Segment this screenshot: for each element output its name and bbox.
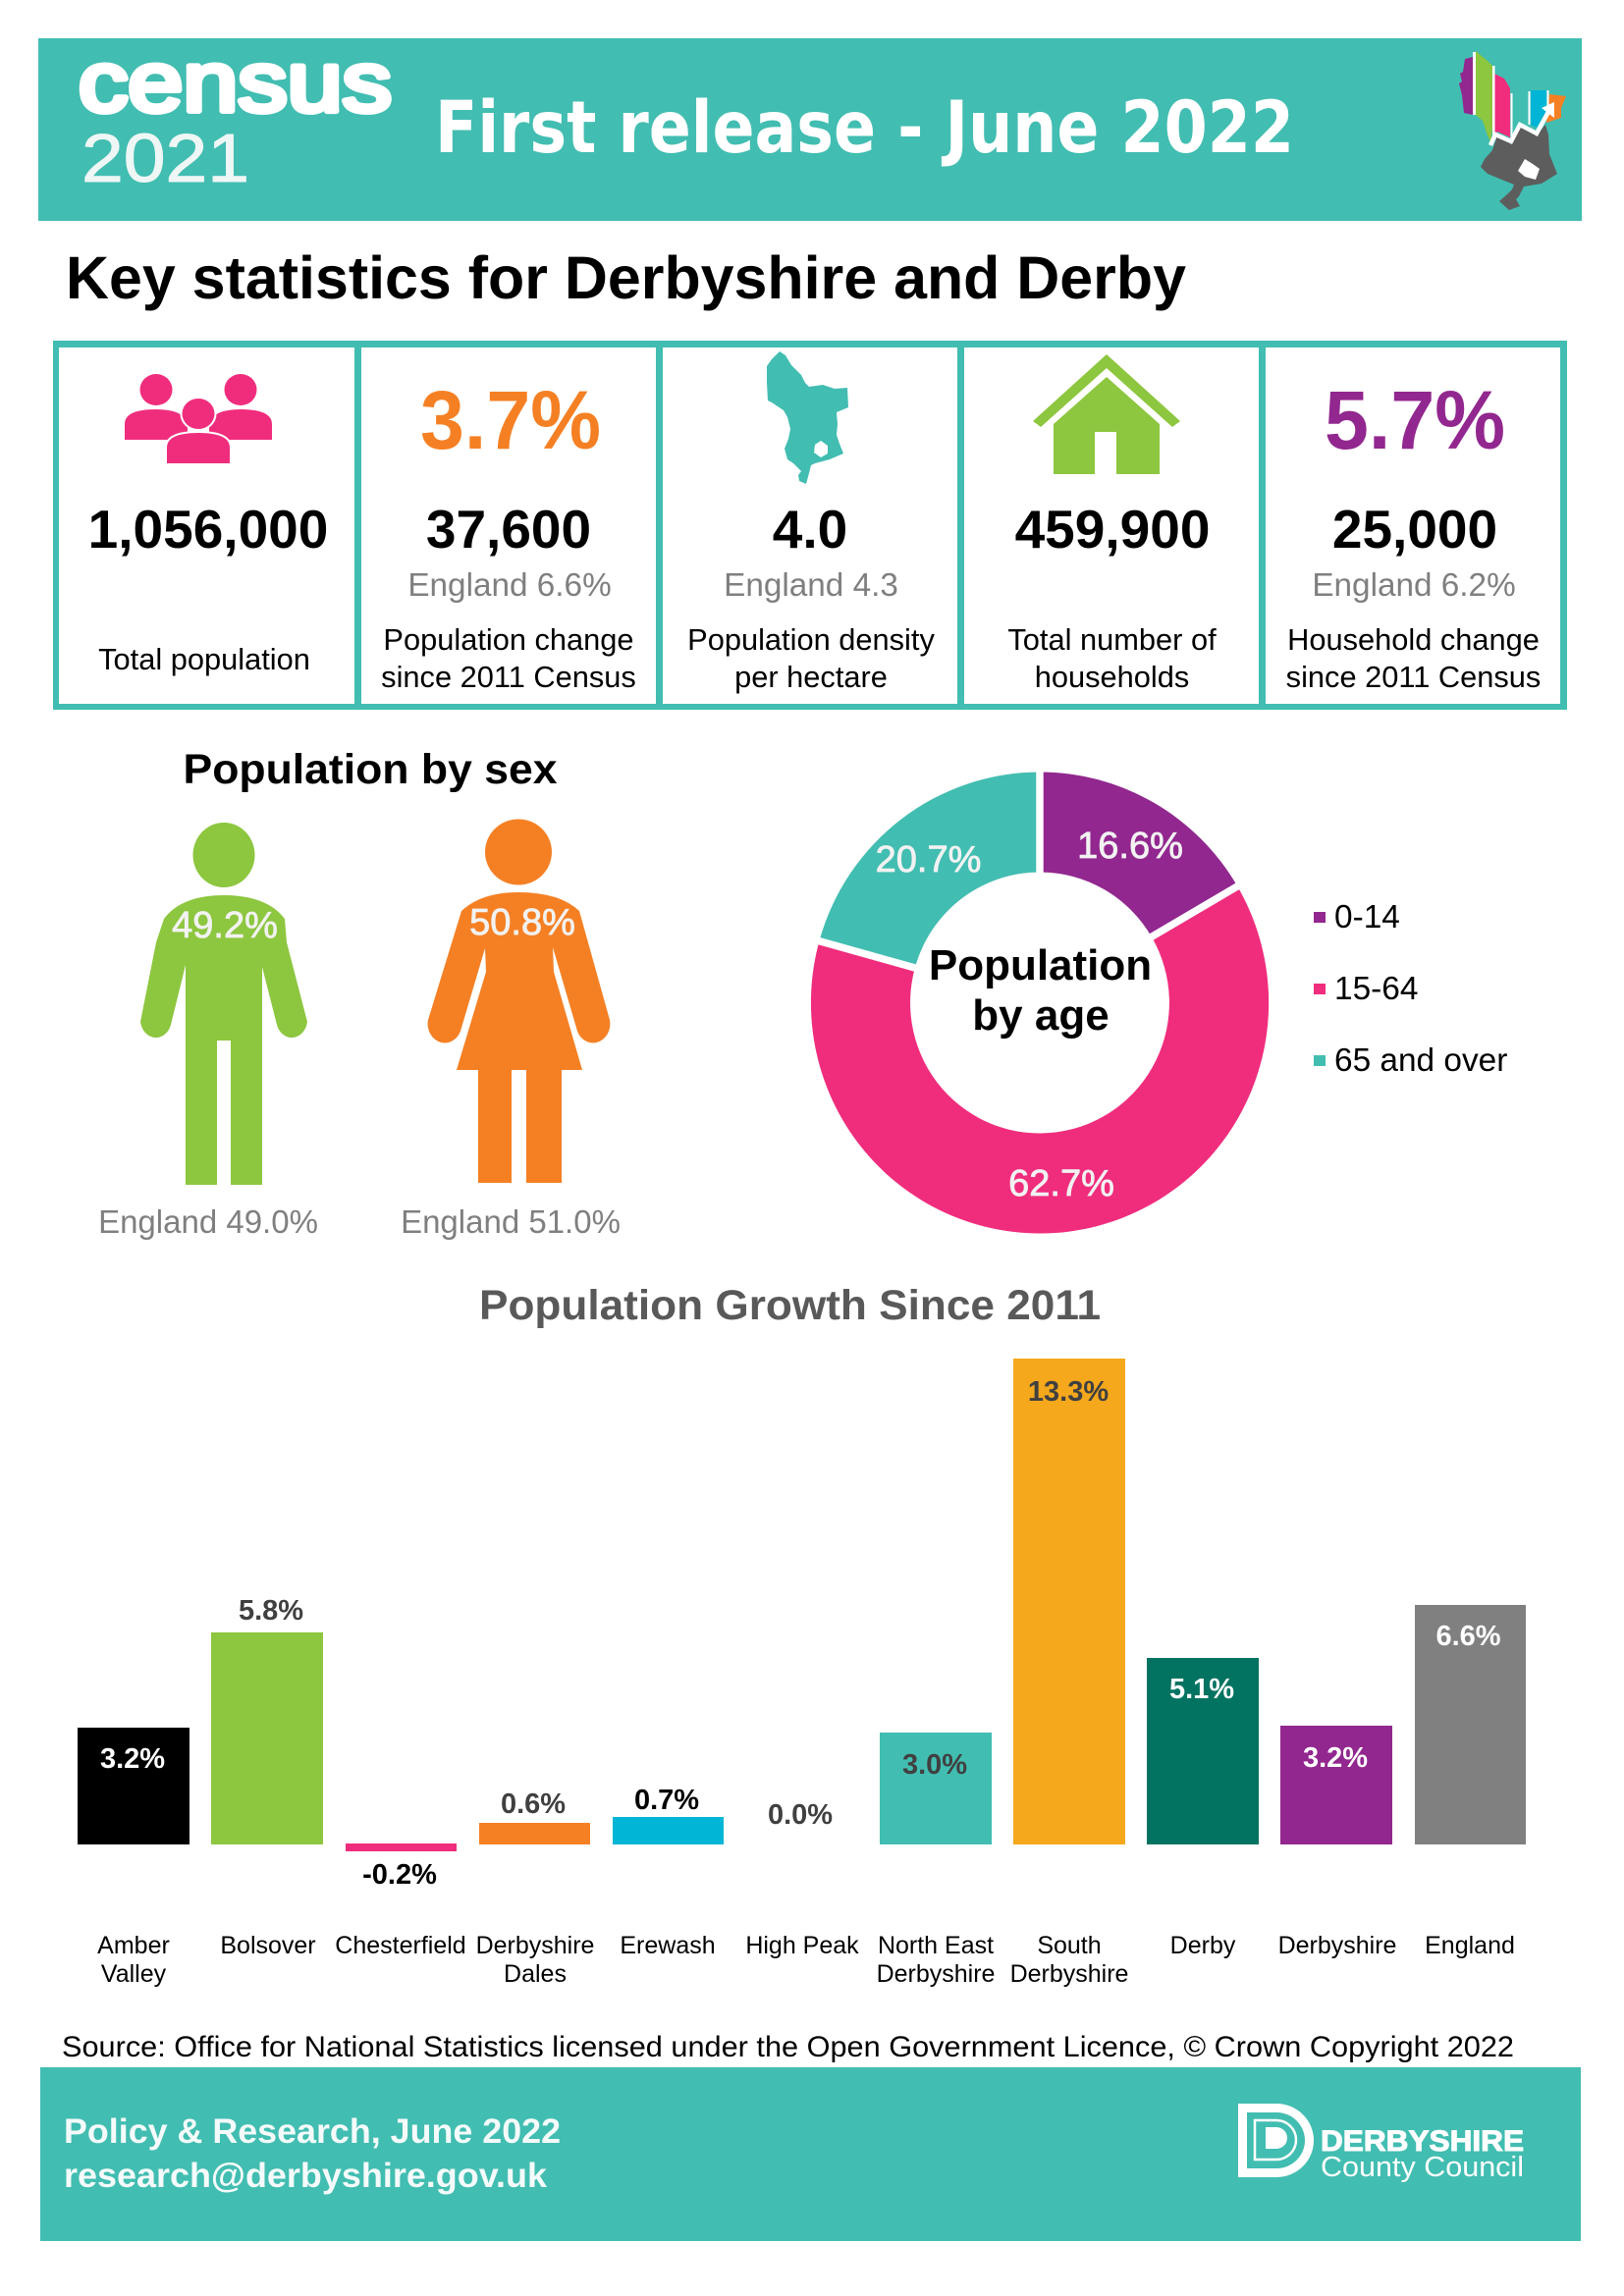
- panel: population density: England 4.3: [724, 567, 898, 604]
- legend: age bands: 15-64: [1334, 971, 1418, 1007]
- bar: Derbyshire: 3.2%: [1303, 1742, 1368, 1774]
- legend: age bands: 65 and over: [1334, 1042, 1507, 1079]
- panel: household change: [1286, 374, 1541, 694]
- bar: High Peak: High Peak: [745, 1932, 859, 1959]
- bar: North East Derbyshire: [877, 1733, 995, 1988]
- bar: North East Derbyshire: Derbyshire: [877, 1960, 995, 1988]
- bar: High Peak: 0.0%: [768, 1799, 833, 1831]
- bar: Amber Valley: Amber: [97, 1932, 170, 1959]
- bar: Amber Valley: 3.2%: [100, 1743, 165, 1775]
- panel: households: Total number of: [1007, 622, 1217, 657]
- panel: population density: Population density: [687, 622, 935, 657]
- panel: total population: Total population: [98, 642, 310, 676]
- panel: household change: since 2011 Census: [1286, 660, 1541, 694]
- bar: Derby: [1147, 1658, 1259, 1959]
- bar: North East Derbyshire: 3.0%: [902, 1749, 967, 1781]
- panel: key statistics grid: [53, 341, 1567, 710]
- heading: population by sex: Population by sex: [183, 746, 558, 793]
- legend: age bands: 0-14: [1334, 899, 1400, 935]
- bar: England: 6.6%: [1435, 1621, 1501, 1652]
- footer contact text: Policy & Research, June 2022: [64, 2112, 561, 2151]
- panel: households: households: [1035, 660, 1189, 694]
- footer contact text: research@derbyshire.gov.uk: [64, 2157, 548, 2195]
- bar: Chesterfield: -0.2%: [362, 1859, 437, 1891]
- panel: population change: 37,600: [426, 499, 591, 560]
- icon: people: [125, 374, 272, 463]
- bar: Derbyshire: [1278, 1726, 1396, 1959]
- Derbyshire County Council logo: [1238, 2104, 1524, 2183]
- Derbyshire County Council logo: County Council: [1321, 2152, 1524, 2183]
- icon: male figure: [140, 823, 307, 1185]
- label: 15-64 share: 62.7%: [1008, 1163, 1114, 1204]
- icon: Derbyshire map: [767, 351, 848, 484]
- panel: population growth bar chart: [78, 1282, 1526, 1988]
- panel: total population: [88, 374, 328, 676]
- bar: Bolsover: [211, 1595, 323, 1959]
- census 2021 logo: census: [79, 35, 392, 130]
- donut centre title: by age: [972, 991, 1110, 1040]
- footer banner: [40, 2067, 1581, 2241]
- bar: Amber Valley: [78, 1728, 189, 1988]
- panel: household change: Household change: [1287, 622, 1540, 657]
- bar: South Derbyshire: South: [1037, 1932, 1102, 1959]
- panel: households: [1007, 354, 1217, 694]
- bar: Bolsover: 5.8%: [239, 1595, 303, 1627]
- header banner: [38, 35, 1582, 221]
- bar: Erewash: [613, 1785, 724, 1959]
- bar: South Derbyshire: [1010, 1359, 1128, 1988]
- census 2021 logo: 2021: [81, 120, 249, 196]
- bar: South Derbyshire: Derbyshire: [1010, 1960, 1128, 1988]
- bar: Amber Valley: Valley: [101, 1960, 167, 1988]
- England female comparison: England 51.0%: [401, 1203, 621, 1240]
- panel: population density: per hectare: [734, 660, 888, 694]
- legend: age bands: [1314, 899, 1507, 1079]
- bar: Derby: 5.1%: [1169, 1674, 1234, 1705]
- footer contact text: [64, 2112, 561, 2195]
- panel: households: 459,900: [1015, 499, 1210, 560]
- bar: Erewash: 0.7%: [634, 1785, 699, 1816]
- donut centre title: Population: [929, 941, 1152, 989]
- Derbyshire County Council logo: DERBYSHIRE: [1321, 2125, 1524, 2158]
- male share: 49.2%: [172, 905, 278, 946]
- icon: Derbyshire map with rising arrow: [1459, 51, 1566, 210]
- label: 0-14 share: 16.6%: [1077, 826, 1183, 867]
- female share: 50.8%: [469, 902, 575, 943]
- bar: England: England: [1425, 1932, 1515, 1959]
- panel: household change: 25,000: [1332, 499, 1497, 560]
- banner title: First release - June 2022: [435, 86, 1294, 170]
- panel: population change: England 6.6%: [407, 567, 612, 604]
- panel: population change: 3.7%: [420, 374, 601, 466]
- bar: Derbyshire Dales: [476, 1789, 594, 1988]
- bar: Derbyshire Dales: 0.6%: [501, 1789, 566, 1820]
- source note: Source: Office for National Statistics licensed under the Open Government Licence, © Crown Copyright 2022: [62, 2031, 1514, 2063]
- panel: population by age donut chart: [810, 766, 1269, 1234]
- panel: population density: [687, 351, 935, 694]
- bar: Chesterfield: [335, 1843, 466, 1959]
- bar: Chesterfield: Chesterfield: [335, 1932, 466, 1959]
- census 2021 logo: [79, 35, 392, 196]
- England male comparison: England 49.0%: [98, 1203, 318, 1240]
- label: 65 and over share: 20.7%: [876, 839, 981, 881]
- panel: household change: 5.7%: [1325, 374, 1505, 466]
- panel: household change: England 6.2%: [1312, 567, 1516, 604]
- bar: Derbyshire Dales: Derbyshire: [476, 1932, 594, 1959]
- panel: population change: [381, 374, 636, 694]
- bar: South Derbyshire: 13.3%: [1028, 1376, 1109, 1408]
- bar: Derbyshire: Derbyshire: [1278, 1932, 1396, 1959]
- bar: England: [1415, 1605, 1526, 1959]
- donut centre title: [929, 941, 1152, 1040]
- panel: total population: 1,056,000: [88, 499, 328, 560]
- bar: North East Derbyshire: North East: [878, 1932, 994, 1959]
- panel: population density: 4.0: [773, 499, 847, 560]
- panel: population change: since 2011 Census: [381, 660, 636, 694]
- main heading: Key statistics for Derbyshire and Derby: [66, 244, 1186, 311]
- bar: Derby: Derby: [1170, 1932, 1236, 1959]
- panel: population change: Population change: [383, 622, 634, 657]
- bar: High Peak: [745, 1799, 859, 1959]
- icon: house: [1033, 354, 1180, 474]
- bar: Bolsover: Bolsover: [220, 1932, 316, 1959]
- icon: female figure: [428, 819, 610, 1183]
- bar: Erewash: Erewash: [620, 1932, 716, 1959]
- bar: Derbyshire Dales: Dales: [504, 1960, 567, 1988]
- panel: population by sex: [98, 746, 621, 1240]
- heading: population growth: Population Growth Since 2011: [479, 1282, 1101, 1329]
